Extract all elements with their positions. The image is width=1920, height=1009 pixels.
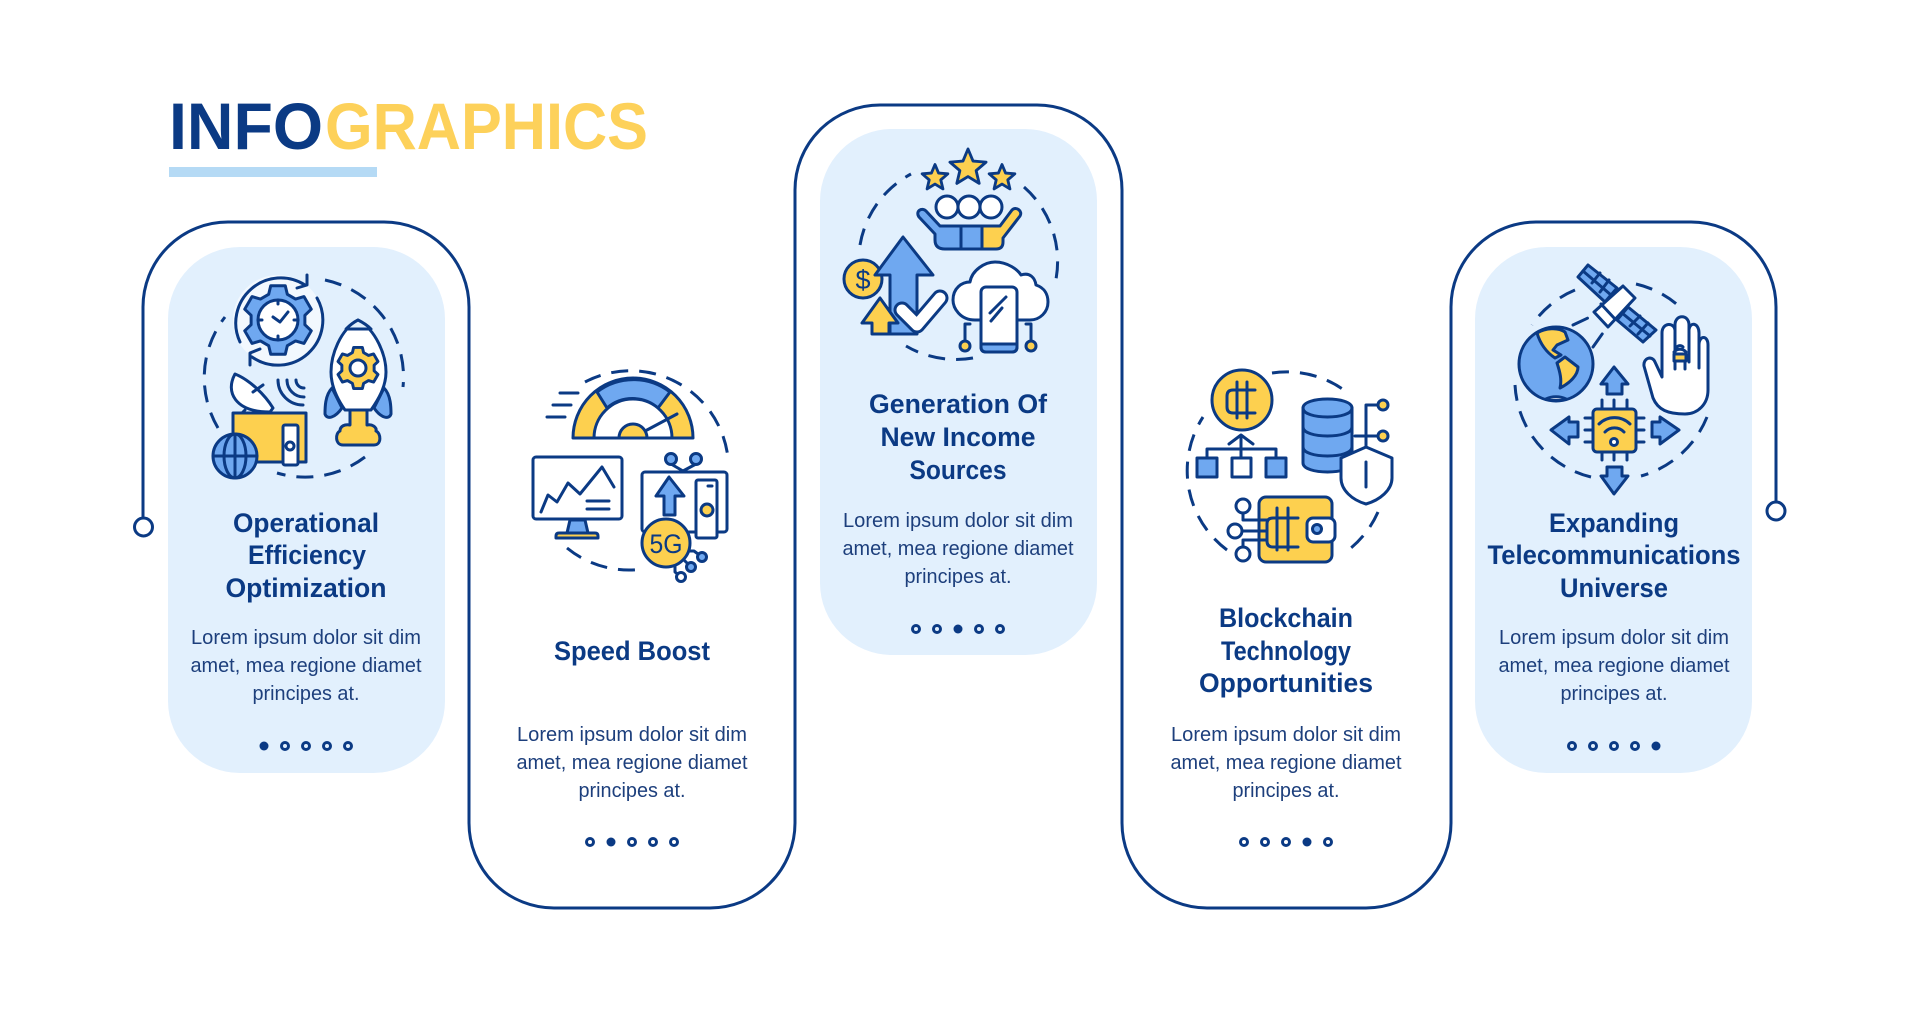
card 3 progress dots: [912, 624, 1004, 634]
card 2 text: Speed Boost: [554, 636, 710, 666]
card 3 text: Lorem ipsum dolor sit dim: [843, 510, 1073, 532]
card 3 text: Generation Of: [869, 389, 1048, 419]
card 5 text: Lorem ipsum dolor sit dim: [1499, 627, 1729, 649]
connecting outline: [134, 105, 1785, 908]
card 1 text: Optimization: [226, 573, 386, 603]
card 2 text: principes at.: [578, 780, 686, 802]
icon: new income sources: $: [855, 265, 871, 295]
card 1 text: [190, 508, 422, 705]
card 3 text: [842, 389, 1074, 588]
card 1 text: Operational: [233, 508, 379, 538]
card 1 text: principes at.: [252, 683, 360, 705]
card 1 text: Lorem ipsum dolor sit dim: [191, 627, 421, 649]
card 4 text: amet, mea regione diamet: [1170, 752, 1402, 774]
card 4 text: Lorem ipsum dolor sit dim: [1171, 724, 1401, 746]
icon: blockchain technology: [1187, 370, 1392, 562]
card 1 text: amet, mea regione diamet: [190, 655, 422, 677]
panel: background card 1: [168, 247, 445, 773]
card 4 text: [1170, 603, 1402, 802]
card 3 text: principes at.: [904, 566, 1012, 588]
card 4 text: Technology: [1221, 636, 1351, 666]
card 1 text: Efficiency: [248, 540, 366, 570]
title underline: [169, 167, 377, 177]
panel: background card 3: [820, 129, 1097, 655]
icon: new income sources: [844, 149, 1058, 359]
card 2 text: [516, 636, 748, 802]
card 5 text: Expanding: [1549, 508, 1679, 538]
icon: telecommunications universe: [1515, 265, 1708, 494]
card 4 text: Opportunities: [1199, 668, 1373, 698]
card 5 text: Telecommunications: [1488, 540, 1740, 570]
card 1 progress dots: [260, 742, 352, 750]
panel: background card 5: [1475, 247, 1752, 773]
icon: speed boost: 5G: [650, 529, 682, 559]
card 5 text: [1488, 508, 1740, 705]
card 5 text: Universe: [1560, 573, 1668, 603]
card 4 text: Blockchain: [1219, 603, 1353, 633]
title: GRAPHICS: [325, 89, 648, 163]
card 5 progress dots: [1568, 742, 1660, 750]
card 3 text: Sources: [910, 455, 1006, 485]
card 5 text: principes at.: [1560, 683, 1668, 705]
card 2 text: Lorem ipsum dolor sit dim: [517, 724, 747, 746]
card 2 progress dots: [586, 838, 678, 846]
card 3 text: amet, mea regione diamet: [842, 538, 1074, 560]
title: [169, 89, 648, 163]
card 4 progress dots: [1240, 838, 1332, 846]
icon: operational efficiency: [204, 275, 404, 478]
card 2 text: amet, mea regione diamet: [516, 752, 748, 774]
card 3 text: New Income: [880, 422, 1036, 452]
card 5 text: amet, mea regione diamet: [1498, 655, 1730, 677]
icon: speed boost: [533, 371, 728, 582]
card 4 text: principes at.: [1232, 780, 1340, 802]
title: INFO: [169, 89, 323, 163]
